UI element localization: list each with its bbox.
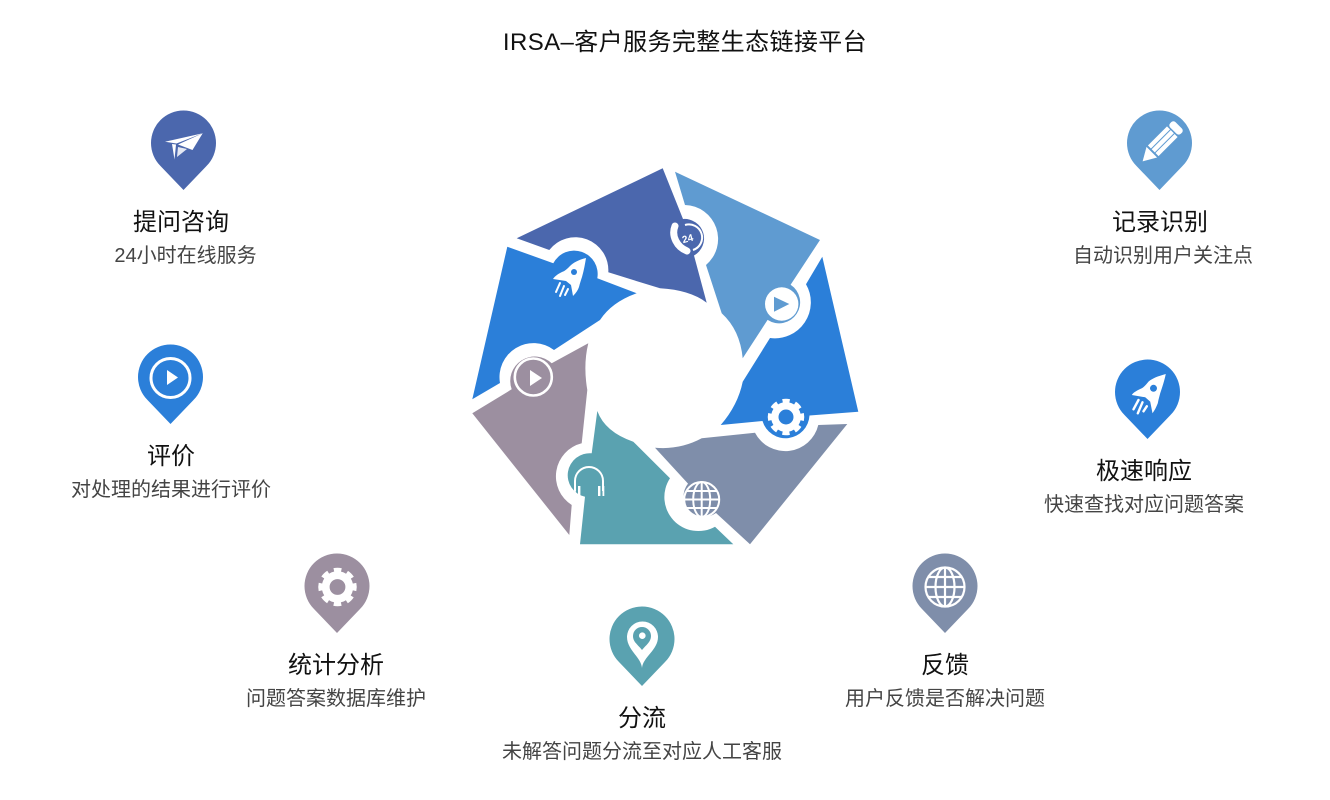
chart: heptagon cycle diagram: [472, 168, 858, 544]
description: 快速查找对应问题答案: [1044, 493, 1244, 516]
heading: 分流: [618, 705, 666, 732]
heading: 提问咨询: [133, 209, 229, 236]
icon: rocket: [553, 258, 586, 296]
segment: slate: [655, 424, 847, 544]
icon: play pin: [138, 345, 203, 424]
callout: 极速响应: [1044, 360, 1244, 516]
segment: dark blue: [517, 168, 707, 303]
icon: pencil pin: [1127, 111, 1192, 190]
heading: 统计分析: [288, 652, 384, 679]
description: 未解答问题分流至对应人工客服: [502, 740, 782, 763]
heading: 记录识别: [1112, 209, 1208, 236]
icon: gear: [767, 398, 805, 436]
title: IRSA–客户服务完整生态链接平台: [503, 29, 867, 56]
heading: 评价: [147, 443, 195, 470]
heading: 极速响应: [1096, 458, 1192, 485]
description: 对处理的结果进行评价: [71, 478, 271, 501]
callout: 反馈: [845, 554, 1045, 710]
callout: 记录识别: [1073, 111, 1253, 267]
icon: phone 24: 24: [681, 233, 695, 246]
callout: 提问咨询: [114, 111, 257, 267]
callout: 分流: [502, 607, 782, 763]
segment: light blue: [675, 172, 820, 358]
icon: play disc: [765, 287, 798, 321]
description: 用户反馈是否解决问题: [845, 687, 1045, 710]
callout: 评价: [71, 345, 271, 501]
description: 自动识别用户关注点: [1073, 244, 1253, 267]
icon: location pin: [609, 607, 674, 686]
heading: 反馈: [921, 652, 969, 679]
segment: blue right: [721, 257, 858, 438]
segment: mauve: [472, 343, 588, 535]
icon: globe: [684, 482, 719, 517]
icon: headphones: [574, 467, 604, 496]
description: 24小时在线服务: [114, 244, 257, 267]
icon: play ring: [515, 358, 552, 396]
icon: paper plane pin: [151, 111, 216, 190]
icon: gear pin: [304, 554, 369, 633]
icon: rocket pin: [1115, 360, 1180, 439]
icon: phone 24: [674, 224, 702, 251]
segment: blue left: [472, 247, 637, 399]
segment: teal: [568, 411, 733, 544]
description: 问题答案数据库维护: [246, 687, 426, 710]
icon: globe pin: [913, 554, 978, 633]
callout: 统计分析: [246, 554, 426, 710]
